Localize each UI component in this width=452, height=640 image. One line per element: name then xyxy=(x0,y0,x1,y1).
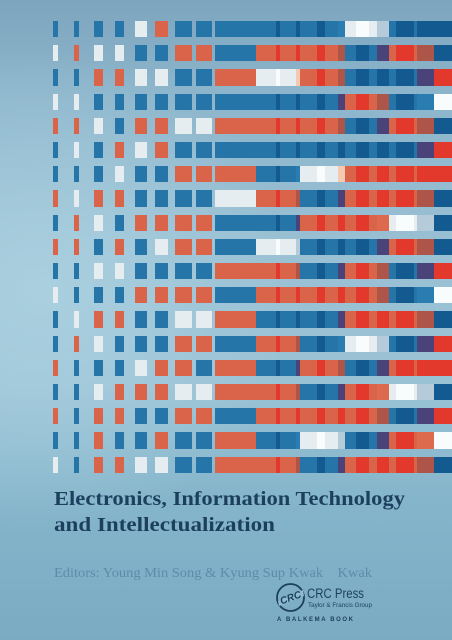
pattern row 3 xyxy=(53,69,452,86)
pattern row 17 xyxy=(53,408,452,424)
pattern row 16 xyxy=(53,384,452,400)
pattern row 12 xyxy=(53,287,452,303)
pattern row 1 xyxy=(53,21,452,37)
pattern row 19 xyxy=(53,457,452,473)
title xyxy=(54,488,405,536)
pattern row 4 xyxy=(53,94,452,110)
colour block pattern xyxy=(53,21,452,473)
publisher logo: CRC Press xyxy=(277,584,373,623)
title: and Intellectualization xyxy=(54,514,275,536)
pattern row 11 xyxy=(53,263,452,279)
pattern row 8 xyxy=(53,190,452,207)
editors: Editors: Young Min Song & Kyung Sup Kwak Kwak xyxy=(54,565,372,580)
publisher name: CRC Press xyxy=(307,586,364,601)
pattern row 10 xyxy=(53,239,452,255)
pattern row 6 xyxy=(53,142,452,158)
pattern row 13 xyxy=(53,311,452,328)
pattern row 9 xyxy=(53,215,452,231)
pattern row 2 xyxy=(53,45,452,61)
pattern row 5 xyxy=(53,118,452,134)
imprint: A BALKEMA BOOK xyxy=(277,617,354,623)
pattern row 7 xyxy=(53,166,452,182)
publisher group: Taylor & Francis Group xyxy=(308,603,373,609)
pattern row 18 xyxy=(53,432,452,449)
pattern row 15 xyxy=(53,360,452,376)
icon: CRC circle: CRC xyxy=(279,589,304,607)
title: Electronics, Information Technology xyxy=(54,488,405,510)
pattern row 14 xyxy=(53,336,452,352)
